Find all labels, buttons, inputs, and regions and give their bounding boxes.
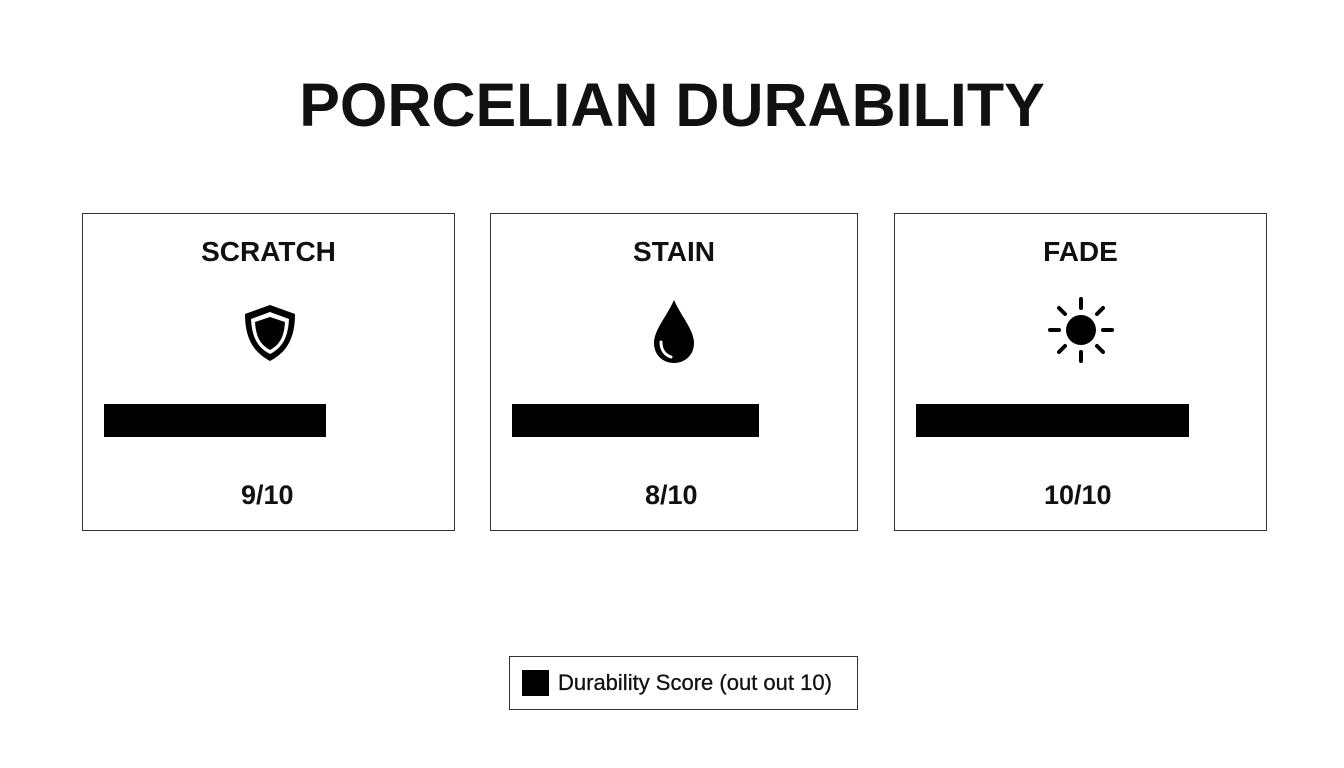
score: 9/10 <box>241 480 294 510</box>
score: 8/10 <box>645 480 698 510</box>
legend text: Durability Score (out out 10) <box>558 670 832 695</box>
bar: 10/10 <box>916 404 1189 437</box>
title: PORCELIAN DURABILITY <box>299 71 1045 139</box>
score: 10/10 <box>1044 480 1112 510</box>
heading: stain: STAIN <box>633 236 715 267</box>
heading: scratch: SCRATCH <box>201 236 336 267</box>
bar: 9/10 <box>104 404 326 437</box>
icon: shield <box>245 305 295 361</box>
icon: sun <box>1048 297 1114 363</box>
legend swatch <box>522 670 549 696</box>
icon: drop <box>654 300 694 363</box>
bar: 8/10 <box>512 404 759 437</box>
heading: fade: FADE <box>1043 236 1118 267</box>
legend <box>509 656 858 710</box>
panel: fade <box>894 213 1267 531</box>
panel: scratch <box>82 213 455 531</box>
panel: stain <box>490 213 858 531</box>
